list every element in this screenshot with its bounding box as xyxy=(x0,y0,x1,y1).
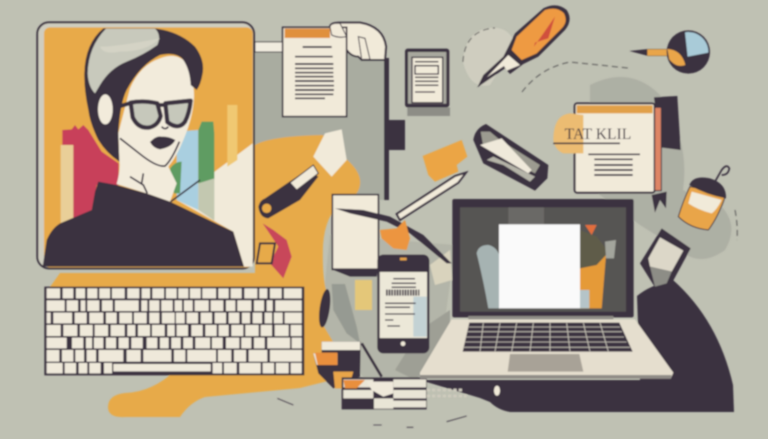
pen xyxy=(397,173,466,220)
mug xyxy=(313,342,361,388)
red brush marks xyxy=(263,223,292,278)
document header xyxy=(285,29,330,38)
desk clutter below phone xyxy=(257,223,467,427)
laptop lid xyxy=(452,199,634,317)
dark clip at left xyxy=(257,243,275,263)
on-screen light shape xyxy=(477,245,500,308)
laptop base xyxy=(420,319,673,379)
notebook lines xyxy=(553,143,640,175)
utility knife, top xyxy=(477,5,570,87)
phone text lines xyxy=(385,279,416,326)
white page on screen xyxy=(499,224,580,308)
trackpad xyxy=(508,354,583,372)
notebook top stripe xyxy=(577,105,653,113)
small keyboard and hand xyxy=(342,377,427,409)
orange sticky note xyxy=(423,140,467,182)
glasses xyxy=(118,101,191,128)
orange paint swash xyxy=(50,135,360,417)
grey and dark tool xyxy=(332,284,360,343)
dark bookmark xyxy=(654,96,681,150)
key rows xyxy=(47,288,302,373)
bar chart behind figure xyxy=(61,105,237,223)
grey hair highlight xyxy=(88,29,159,93)
diagonal arm xyxy=(362,343,382,377)
paintbrush tool xyxy=(258,129,347,218)
blank document xyxy=(332,195,452,277)
dashed arc decoration xyxy=(463,28,737,240)
notebook page xyxy=(575,103,655,193)
small white mark xyxy=(494,386,500,396)
notebook with heading xyxy=(553,96,681,213)
face and neck xyxy=(117,56,194,202)
hand xyxy=(330,23,386,60)
fingers over page xyxy=(330,23,370,59)
white paper tab xyxy=(313,129,347,177)
document page xyxy=(283,27,347,117)
laptop screen xyxy=(460,207,626,312)
small framed picture xyxy=(640,228,691,290)
orange label blob xyxy=(553,113,583,153)
on-screen orange figure xyxy=(580,230,606,308)
jar icon xyxy=(678,166,729,230)
laptop xyxy=(420,199,673,396)
dark swoosh under laptop xyxy=(420,280,734,412)
keys on dark swoosh xyxy=(427,390,467,396)
jaw line and neck marks xyxy=(120,127,179,193)
smartphone xyxy=(377,255,429,353)
background shapes xyxy=(255,28,731,395)
lips xyxy=(150,136,175,149)
dashed desk marks xyxy=(277,398,467,427)
cream light beam xyxy=(177,143,253,267)
notebook spine xyxy=(655,107,661,191)
phone home button xyxy=(401,341,405,346)
stapler tool xyxy=(473,124,548,191)
pencil line xyxy=(171,180,200,202)
pie chart pin xyxy=(629,30,710,74)
heading text: TAT KLIL xyxy=(565,126,631,143)
keyboard xyxy=(44,287,304,375)
scissors xyxy=(335,208,452,263)
laptop hinge xyxy=(468,316,613,319)
laptop keys xyxy=(463,323,633,352)
document text lines xyxy=(295,47,334,98)
portrait background xyxy=(44,27,253,267)
sticky note and small pen xyxy=(397,140,467,220)
phone speaker xyxy=(400,258,407,260)
bookmark clip xyxy=(652,192,667,213)
orange scrap xyxy=(380,220,410,250)
hair xyxy=(84,28,203,162)
jacket xyxy=(43,182,244,267)
grey hair sweep xyxy=(100,38,160,53)
portrait frame xyxy=(37,22,254,268)
document with hand, top centre xyxy=(283,23,386,117)
tablet icon xyxy=(405,49,450,116)
portrait panel xyxy=(37,22,254,268)
ear xyxy=(98,94,113,124)
